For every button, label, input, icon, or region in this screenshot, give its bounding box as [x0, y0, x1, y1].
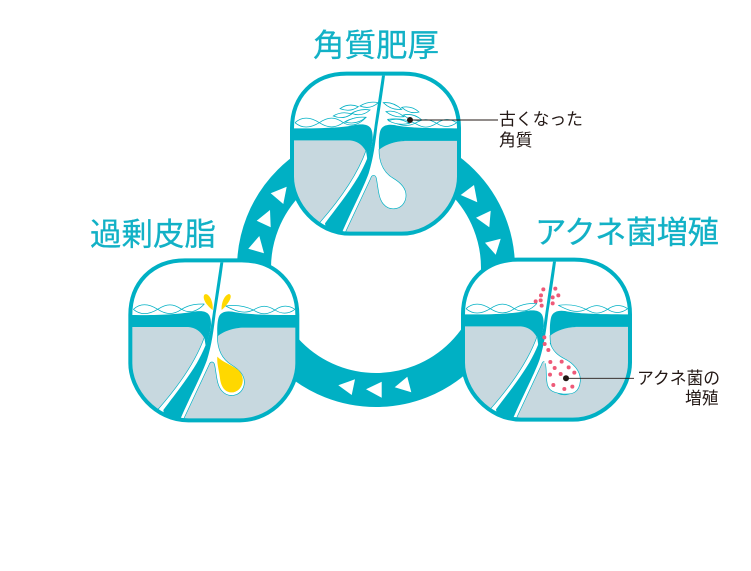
callout: bacteria leader	[563, 375, 634, 381]
callout: old corneum leader	[407, 117, 498, 123]
label: old corneum: 古くなった	[499, 110, 583, 129]
ring: connecting cycle band	[254, 146, 498, 390]
arrows: upper right ring section	[461, 185, 501, 255]
arrows: upper left ring section	[248, 187, 287, 253]
panel: thickened stratum corneum	[287, 74, 462, 237]
label: bacteria growth	[637, 369, 720, 408]
label: bacteria growth: アクネ菌の	[637, 369, 720, 388]
bacteria dots	[534, 287, 576, 391]
old corneum cells	[333, 102, 422, 124]
panel: excess sebum	[125, 260, 300, 423]
panel: acne bacteria growth	[458, 260, 633, 423]
label: old corneum	[499, 110, 583, 150]
title: acne bacteria growth: アクネ菌増殖	[535, 214, 719, 250]
label: bacteria growth: 増殖	[685, 389, 719, 408]
title: excess sebum: 過剰皮脂	[90, 216, 216, 252]
label: old corneum: 角質	[499, 131, 533, 150]
arrows: bottom ring section	[338, 377, 411, 398]
sebum in gland	[217, 357, 243, 392]
title: stratum corneum thickening: 角質肥厚	[313, 27, 439, 63]
icon: sebum droplets	[204, 294, 231, 310]
